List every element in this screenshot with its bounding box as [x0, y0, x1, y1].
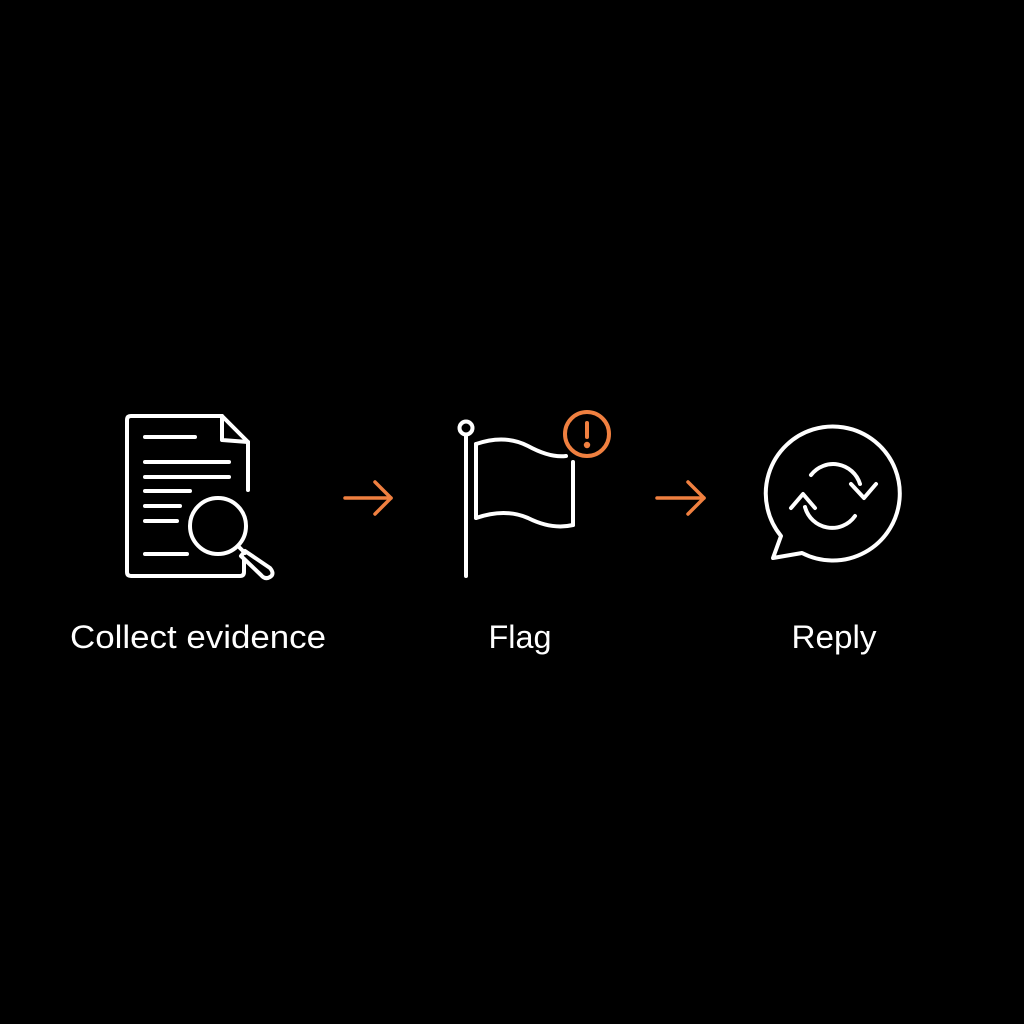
- arrow 2: [657, 482, 704, 514]
- arrow 1: [345, 482, 391, 514]
- alert badge: [565, 412, 609, 456]
- icon: document with magnifier: [127, 416, 272, 578]
- label: Collect evidence: Collect evidence: [70, 619, 326, 655]
- icon: flag with alert: [460, 412, 609, 576]
- label: Flag: Flag: [488, 619, 552, 655]
- icon: reply speech bubble with refresh: [766, 426, 900, 560]
- label: Reply: Reply: [792, 619, 876, 655]
